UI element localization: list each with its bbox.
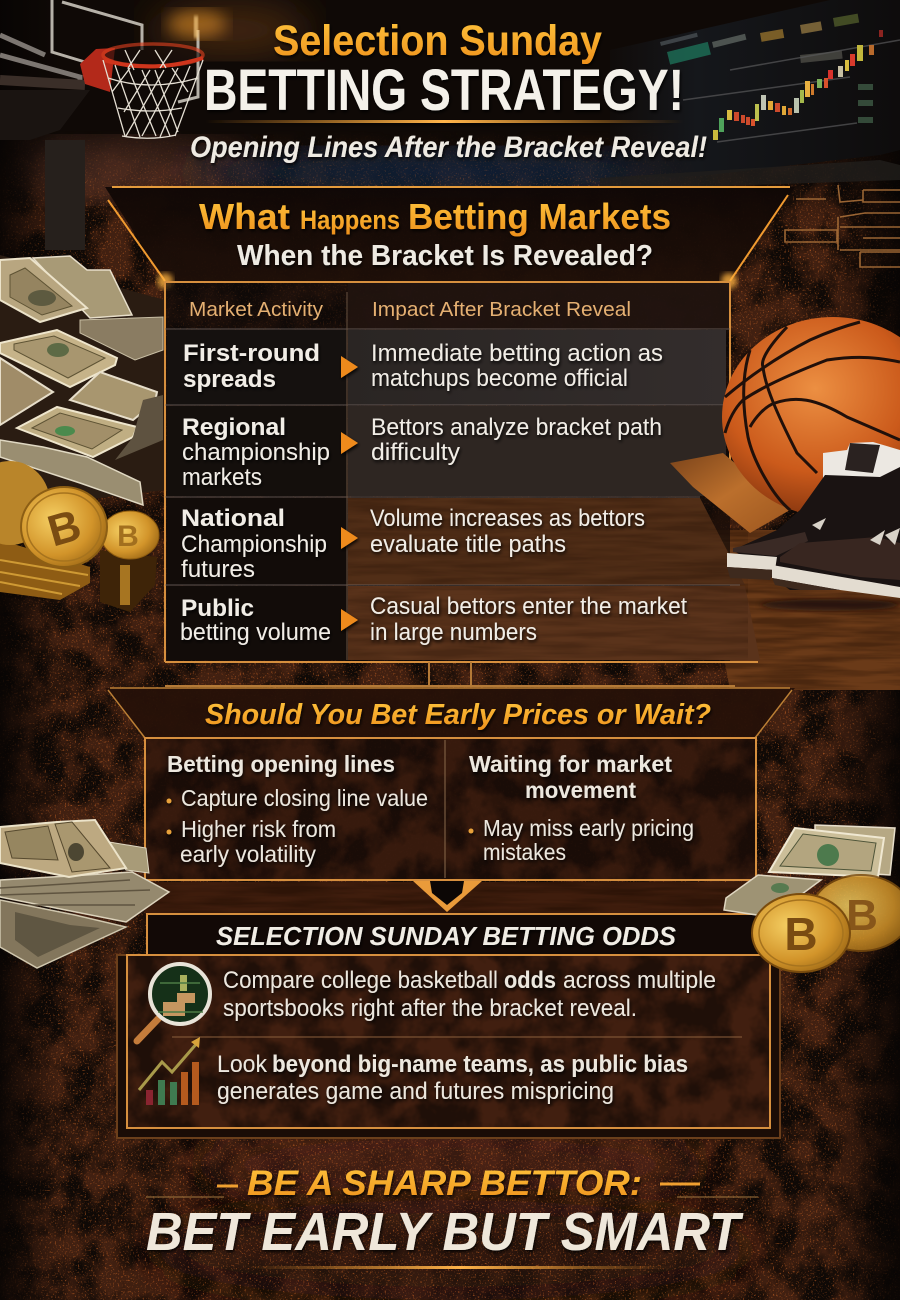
row: first-round spreads: Immediate betting action as (371, 340, 663, 367)
row: regional championship markets: Regional (182, 414, 286, 441)
heading: what happens line one: Happens (300, 205, 400, 235)
icon: sneakers (727, 442, 900, 611)
column: waiting for market movement: May miss early pricing (483, 815, 694, 841)
wood floor and plank (700, 530, 900, 690)
row: national championship futures: futures (181, 556, 255, 583)
row: public betting volume: Public (181, 595, 254, 622)
heading: should you bet early: Should You Bet Early Prices or Wait? (205, 699, 711, 731)
bracket lines decoration (785, 185, 900, 267)
row: public betting volume: Casual bettors enter the market (370, 593, 687, 620)
money and bitcoin coins right: B (784, 908, 818, 960)
row: first-round spreads (183, 340, 663, 393)
plank under basketball (670, 453, 790, 533)
row: first-round spreads: spreads (183, 366, 276, 393)
heading: Betting Strategy: BETTING STRATEGY! (204, 58, 684, 123)
backboard and basketball hoop (0, 0, 227, 250)
column: waiting for market movement (468, 751, 694, 865)
bitcoin coins left: B (117, 520, 139, 553)
text: compare odds: across multiple (563, 967, 716, 994)
row: national championship futures: Championship (181, 531, 327, 558)
title divider line (205, 120, 683, 123)
row: public betting volume: in large numbers (370, 619, 537, 646)
row: regional championship markets: markets (182, 464, 262, 491)
row: public betting volume (180, 593, 687, 646)
row: first-round spreads: matchups become official (371, 365, 628, 392)
panel header bar (147, 914, 770, 955)
text: compare odds: sportsbooks right after the bracket reveal. (223, 995, 637, 1022)
row: regional championship markets: championship (182, 439, 330, 466)
heading: Selection Sunday: Selection Sunday (273, 17, 602, 65)
table header (189, 299, 631, 321)
column: betting opening lines: Betting opening lines (167, 751, 395, 777)
money stack left top (0, 255, 165, 510)
column: betting opening lines: early volatility (180, 841, 316, 867)
table header: Impact After Bracket Reveal (372, 299, 631, 321)
title block (190, 17, 707, 164)
column: betting opening lines: Capture closing line value (181, 785, 428, 811)
panel: banner what happens (105, 187, 795, 289)
money stack left bottom (0, 820, 169, 968)
icon: rising bar chart (139, 1037, 200, 1105)
footer line: be a sharp bettor: BE A SHARP BETTOR: (247, 1164, 642, 1203)
bitcoin coins left: B (42, 501, 86, 556)
heading: what happens line two: When the Bracket Is Revealed? (237, 240, 653, 272)
row: national championship futures: Volume increases as bettors (370, 505, 645, 532)
table header: Market Activity (189, 299, 323, 321)
row: national championship futures (181, 505, 645, 583)
table left column cells (167, 330, 347, 660)
text: compare odds: Compare college basketball (223, 967, 498, 994)
panel: selection sunday betting odds (117, 914, 780, 1138)
row: first-round spreads: First-round (183, 340, 320, 367)
text: look beyond big-name teams: generates game and futures mispricing (217, 1078, 614, 1105)
row: regional championship markets: difficulty (371, 439, 460, 466)
column: waiting for market movement: mistakes (483, 839, 566, 865)
row: national championship futures: National (181, 505, 285, 532)
money and bitcoin coins right (724, 825, 900, 972)
column: waiting for market movement: Waiting for market (469, 751, 672, 777)
column: betting opening lines: Higher risk from (181, 816, 336, 842)
scoreboard with candlestick chart (600, 0, 900, 190)
candles (713, 30, 883, 140)
panel: should you bet early (105, 688, 795, 880)
subtitle: Opening Lines After the Bracket Reveal! (190, 131, 707, 164)
band between panels with chevron arrow (145, 881, 765, 914)
text: look beyond big-name teams (217, 1051, 688, 1105)
icon: basketball (722, 317, 900, 517)
icon: magnifying glass (137, 964, 210, 1041)
column: waiting for market movement: movement (525, 777, 636, 803)
column: betting opening lines (166, 751, 428, 867)
panel header bar: SELECTION SUNDAY BETTING ODDS (216, 921, 677, 951)
text: look beyond big-name teams: Look (217, 1051, 268, 1078)
panel: market activity table (165, 282, 760, 662)
text: compare odds (223, 967, 716, 1022)
footer call to action (146, 1164, 758, 1269)
table right column cells (348, 283, 760, 660)
row: national championship futures: evaluate title paths (370, 531, 566, 558)
footer line: bet early but smart: BET EARLY BUT SMART (146, 1202, 744, 1262)
heading: what happens line one (199, 196, 671, 237)
heading: what happens line one: What (199, 196, 290, 237)
bitcoin coins left (0, 461, 159, 612)
row: public betting volume: betting volume (180, 619, 331, 646)
row: regional championship markets: Bettors analyze bracket path (371, 414, 662, 441)
connector between sections (165, 662, 735, 686)
heading: what happens line one: Betting Markets (408, 196, 671, 237)
row: regional championship markets (182, 414, 662, 491)
text: compare odds: odds (504, 967, 556, 994)
money and bitcoin coins right: B (846, 891, 878, 940)
text: look beyond big-name teams: beyond big-name teams, as public bias (272, 1051, 688, 1078)
